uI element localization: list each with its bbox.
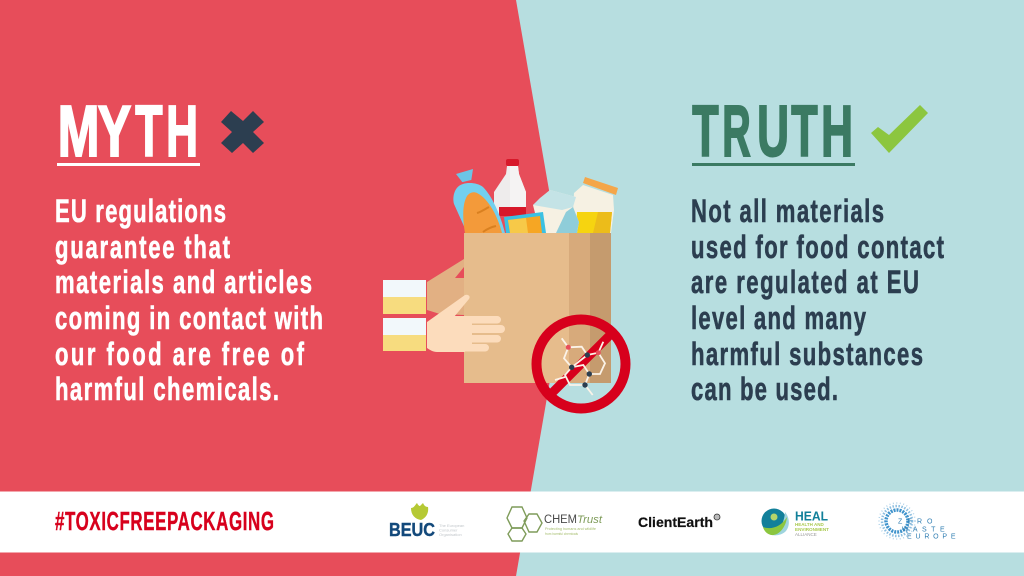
icon: milk carton xyxy=(533,190,579,233)
icon: cross xyxy=(221,111,264,153)
logo: Zero Waste Europe: EUROPE xyxy=(907,534,959,540)
heading: truth: H xyxy=(821,92,853,172)
text: myth statement: guarantee that xyxy=(55,229,230,265)
logo: HEAL: ENVIRONMENT xyxy=(795,527,829,532)
icon: lower sleeve xyxy=(383,318,426,351)
text: truth statement: are regulated at EU xyxy=(691,264,919,300)
logo: Zero Waste Europe: WASTE xyxy=(902,526,949,534)
text: myth statement: EU regulations xyxy=(55,193,226,229)
icon: snack packet xyxy=(504,212,546,233)
panel: truth xyxy=(691,92,944,407)
logo: Zero Waste Europe xyxy=(879,503,959,540)
heading: truth: R xyxy=(722,92,751,172)
logo: CHEM Trust xyxy=(507,507,603,541)
icon: front hand xyxy=(427,295,505,352)
icon: bottle xyxy=(494,159,526,216)
logo: CHEM Trust: CHEM xyxy=(544,514,577,526)
heading: myth: H xyxy=(166,92,198,172)
logo: CHEM Trust: from harmful chemicals xyxy=(545,531,578,536)
text: truth statement xyxy=(691,193,944,407)
text: myth statement: coming in contact with xyxy=(55,300,323,336)
logo: BEUC xyxy=(389,503,464,540)
text: myth statement: our food are free of xyxy=(55,336,305,372)
heading: myth: Y xyxy=(98,92,131,172)
logo: CHEM Trust: Protecting humans and wildlife xyxy=(545,526,597,531)
heading: myth xyxy=(57,92,200,172)
footer band xyxy=(0,492,1024,552)
text: truth statement: harmful substances xyxy=(691,336,923,372)
hashtag: #TOXICFREEPACKAGING xyxy=(55,506,274,536)
illustration: grocery bag with hands xyxy=(383,159,626,408)
icon: no chemicals sign xyxy=(536,320,626,408)
text: myth statement: materials and articles xyxy=(55,264,312,300)
icon: jar xyxy=(573,177,618,233)
panel: myth xyxy=(55,92,323,407)
icon: bread in bag xyxy=(453,169,505,233)
logo: BEUC: The European xyxy=(439,523,464,528)
icon: check mark xyxy=(871,105,928,153)
heading: truth: T xyxy=(791,92,818,172)
icon: back hand xyxy=(427,259,464,315)
text: truth statement: can be used. xyxy=(691,371,838,407)
heading: myth: T xyxy=(135,92,163,172)
icon: molecule xyxy=(555,338,605,395)
logo: BEUC: BEUC xyxy=(389,519,435,540)
background: myth panel xyxy=(0,0,566,576)
logo: ClientEarth: ClientEarth xyxy=(638,514,713,530)
text: myth statement: harmful chemicals. xyxy=(55,371,279,407)
logo: HEAL: ALLIANCE xyxy=(795,532,817,537)
text: myth statement xyxy=(55,193,323,407)
heading: truth: T xyxy=(692,92,719,172)
text: truth statement: level and many xyxy=(691,300,867,336)
text: truth statement: Not all materials xyxy=(691,193,884,229)
logo: HEAL: HEALTH AND xyxy=(795,522,824,527)
heading: truth: U xyxy=(757,92,789,172)
logo: BEUC: Organisation xyxy=(439,532,462,537)
text: truth statement: used for food contact xyxy=(691,229,944,265)
heading: myth: M xyxy=(58,92,99,172)
logo: CHEM Trust: Trust xyxy=(577,514,603,526)
logo: HEAL xyxy=(762,508,829,537)
logo: BEUC: Consumer xyxy=(439,528,458,532)
heading: truth xyxy=(692,92,855,172)
icon: paper bag xyxy=(464,233,611,383)
logo: Zero Waste Europe: ZERO xyxy=(898,518,937,526)
icon: upper sleeve xyxy=(383,280,426,314)
logo: HEAL: HEAL xyxy=(795,510,828,524)
